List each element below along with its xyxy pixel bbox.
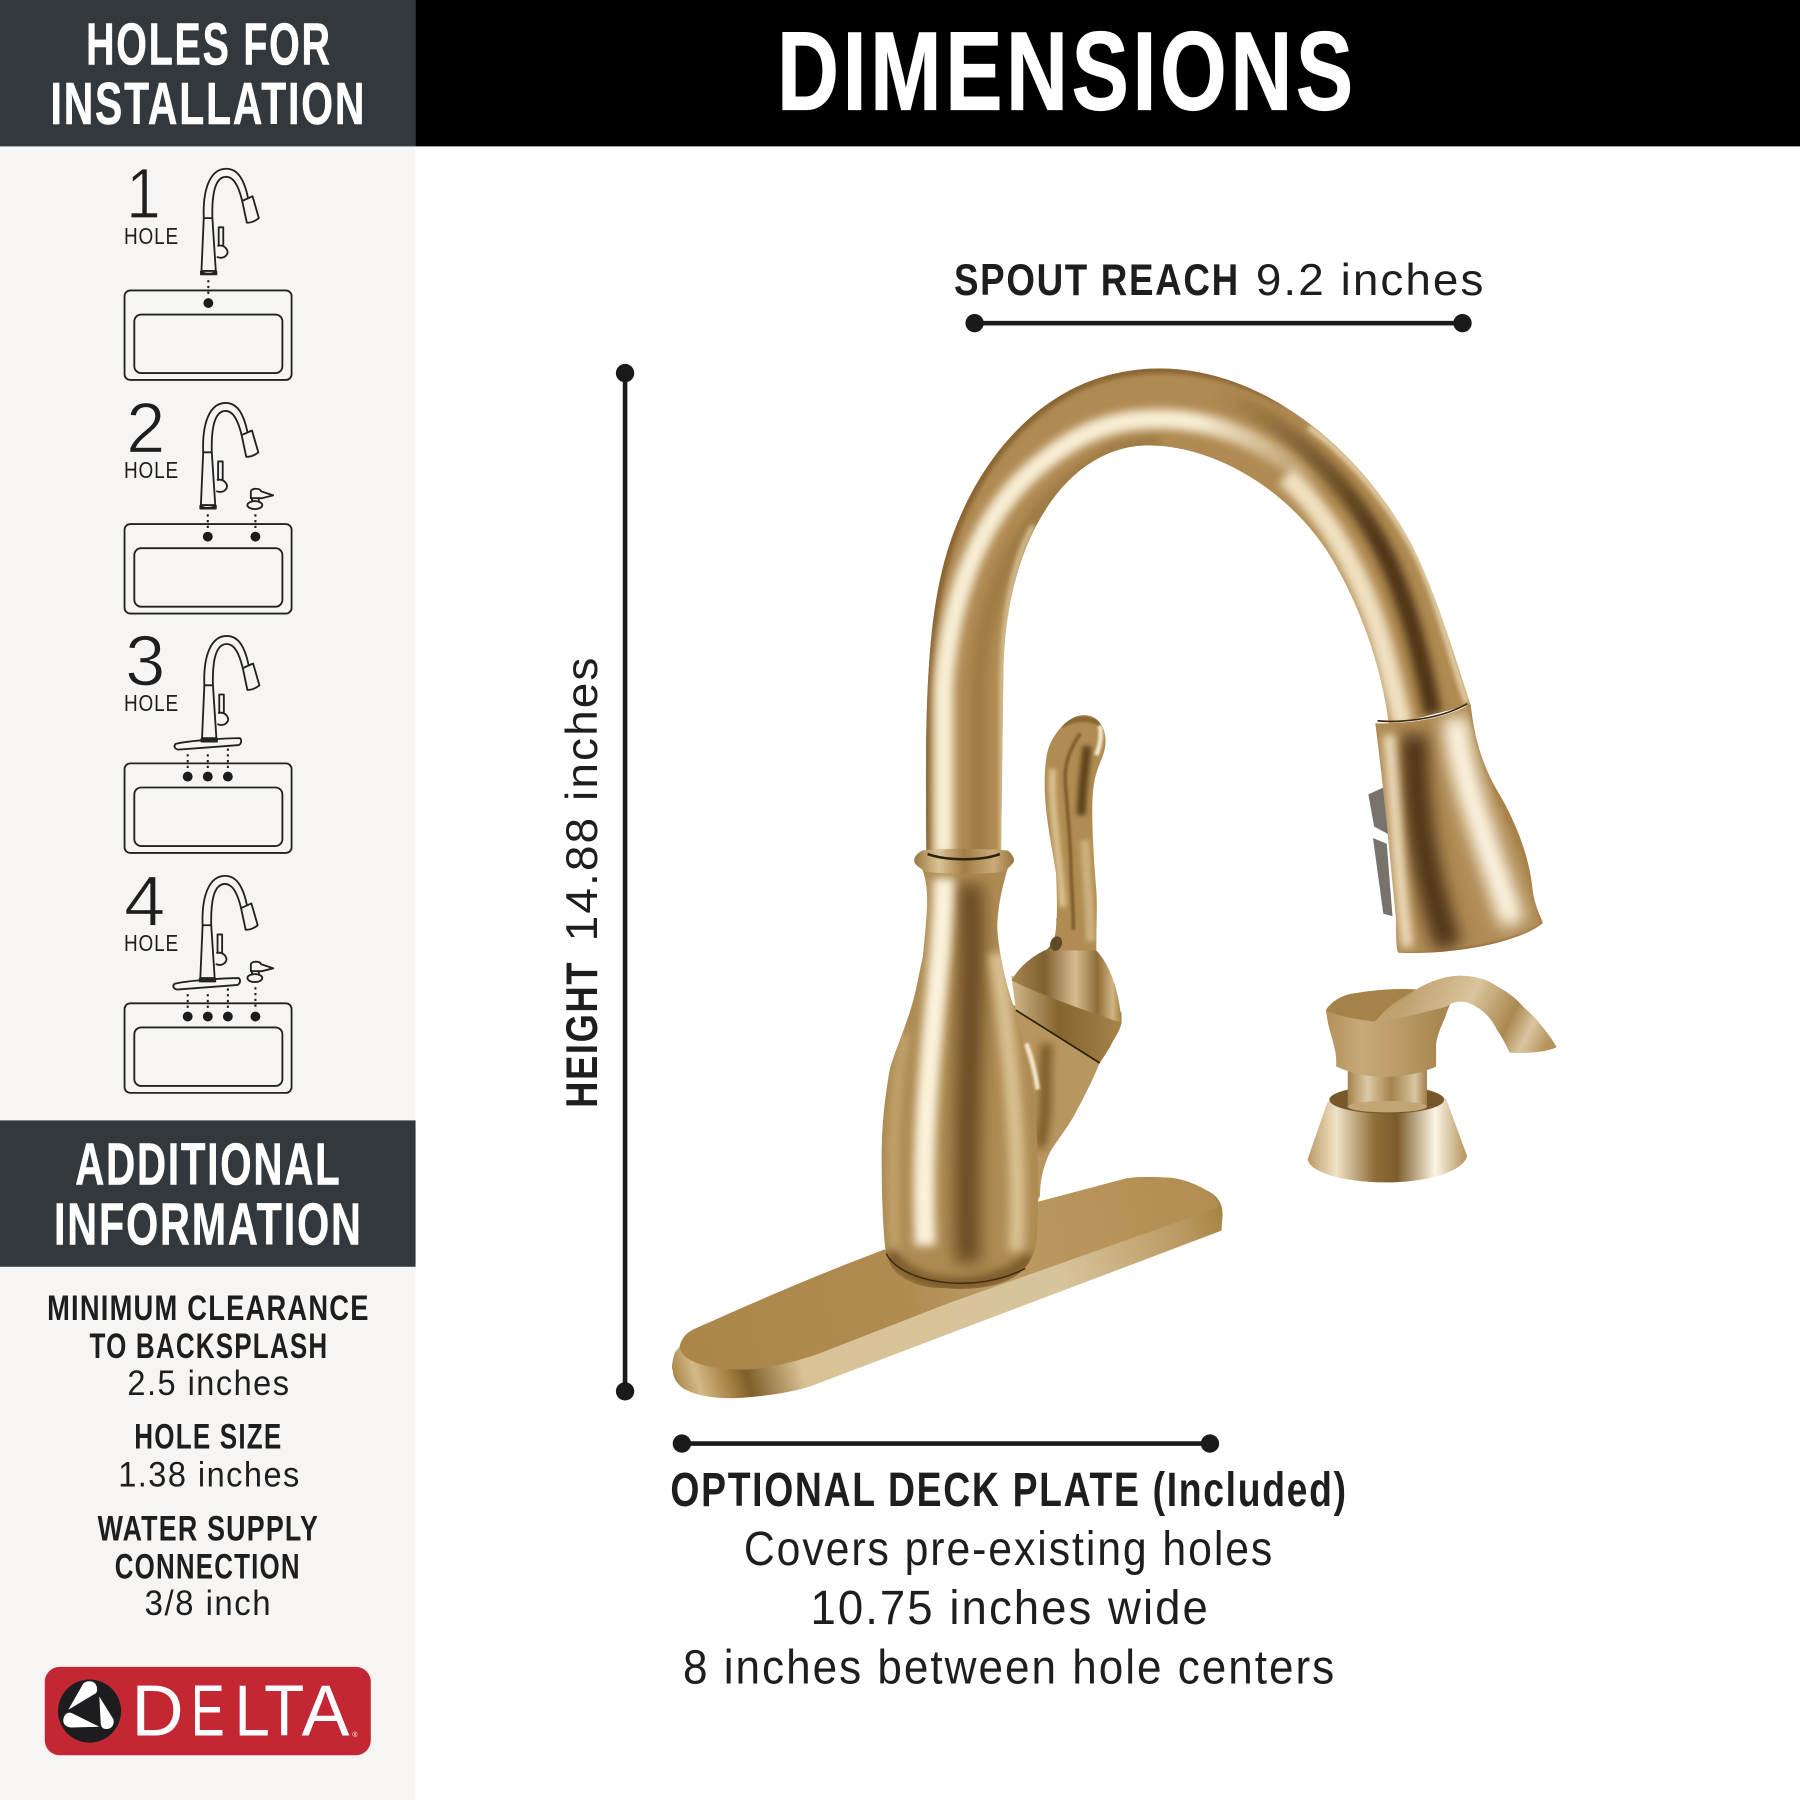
handle dome [1011, 918, 1122, 1023]
text block: minimum clearance: MINIMUM CLEARANCE [47, 1288, 370, 1328]
text block: hole size [118, 1417, 301, 1495]
text block: minimum clearance: TO BACKSPLASH [90, 1326, 328, 1366]
option: 4 hole: 4 [124, 862, 165, 941]
collar [914, 849, 1014, 874]
label: height: HEIGHT [557, 961, 607, 1108]
handle band [1011, 976, 1122, 1063]
text block: minimum clearance: 2.5 inches [127, 1363, 290, 1403]
arrow: height dimension line [616, 364, 634, 1401]
text block: minimum clearance [47, 1288, 370, 1403]
dispenser pump [1326, 976, 1460, 1077]
option: 3 hole: 3 [125, 622, 165, 701]
dispenser spout [1374, 976, 1557, 1053]
label: height [557, 655, 607, 1108]
option: 1 hole [124, 155, 292, 380]
option: 2 hole: 2 [126, 389, 165, 468]
option: 1 hole: HOLE [124, 223, 179, 249]
option: 3 hole: HOLE [124, 690, 179, 716]
label: spout reach: 9.2 inches [1256, 255, 1485, 305]
text block: optional deck plate [670, 1463, 1348, 1694]
text block: hole size: HOLE SIZE [134, 1417, 282, 1457]
product photo: pull-down faucet [672, 368, 1544, 1398]
text block: water supply connection [98, 1509, 319, 1623]
heading: additional information: INFORMATION [54, 1190, 363, 1257]
handle arm [1004, 999, 1100, 1217]
label: height: 14.88 inches [557, 655, 607, 941]
dispenser stem [1348, 1068, 1427, 1112]
text block: optional deck plate: 8 inches between hole centers [683, 1640, 1336, 1694]
logo: Delta: A [302, 1672, 350, 1752]
text block: water supply connection: 3/8 inch [145, 1583, 272, 1623]
panel: left sidebar [0, 0, 416, 1800]
logo: Delta: L [235, 1672, 270, 1752]
arrow: spout reach dimension line [965, 314, 1472, 332]
dispenser base [1308, 1085, 1467, 1182]
title banner: dimensions: DIMENSIONS [777, 9, 1357, 134]
product photo: soap dispenser [1308, 976, 1557, 1182]
text block: hole size: 1.38 inches [118, 1455, 301, 1495]
dispenser top dish [1326, 989, 1417, 1022]
pull-down spray head [1375, 704, 1544, 955]
logo: Delta: ® [352, 1731, 358, 1739]
deck plate [672, 1177, 1223, 1398]
spray head buttons [1368, 788, 1392, 916]
text block: optional deck plate: OPTIONAL DECK PLATE (Included) [670, 1463, 1348, 1517]
logo: Delta: D [132, 1672, 184, 1752]
text block: water supply connection: CONNECTION [115, 1546, 301, 1586]
option: 2 hole [124, 389, 292, 614]
faucet body [882, 868, 1038, 1289]
option: 1 hole: 1 [126, 155, 161, 234]
spout [926, 368, 1471, 855]
heading: additional information [0, 1120, 416, 1267]
text block: water supply connection: WATER SUPPLY [98, 1509, 319, 1549]
heading: additional information: ADDITIONAL [75, 1131, 342, 1198]
heading: holes for installation: INSTALLATION [51, 70, 366, 137]
text block: optional deck plate: 10.75 inches wide [810, 1581, 1210, 1635]
logo: Delta [45, 1667, 371, 1755]
handle lever [1045, 715, 1106, 951]
title banner: dimensions [416, 0, 1800, 146]
arm highlight [1026, 1043, 1038, 1089]
label: spout reach: SPOUT REACH [954, 255, 1240, 305]
logo: Delta: E [191, 1672, 225, 1752]
arrow: deck plate dimension line [673, 1434, 1219, 1453]
logo: Delta: T [264, 1672, 304, 1752]
heading: holes for installation: HOLES FOR [86, 10, 332, 77]
option: 2 hole: HOLE [124, 457, 179, 483]
text block: optional deck plate: Covers pre-existing holes [744, 1522, 1274, 1576]
label: spout reach [954, 255, 1485, 305]
option: 3 hole [124, 622, 292, 853]
temperature indicator [1048, 935, 1064, 953]
option: 4 hole: HOLE [124, 930, 179, 956]
option: 4 hole [124, 862, 292, 1093]
heading: holes for installation [0, 0, 416, 146]
